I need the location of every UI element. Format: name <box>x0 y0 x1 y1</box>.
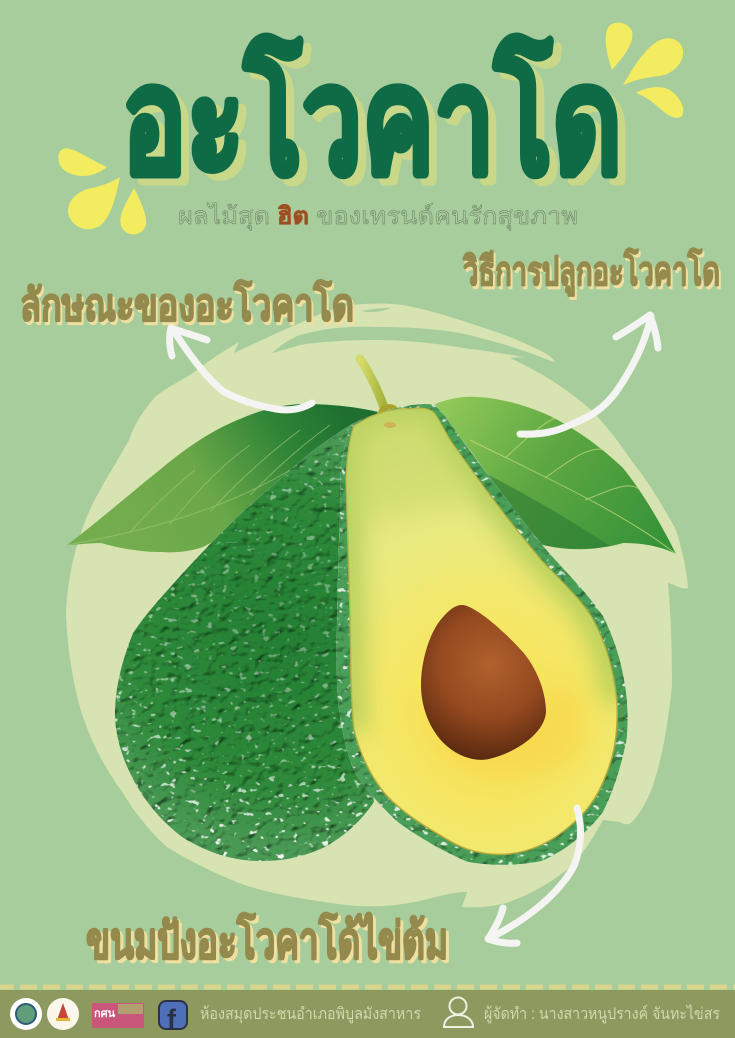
icon: facebook <box>159 1001 187 1034</box>
stem <box>360 359 400 424</box>
heading: ขนมปังอะโวคาโด้ไข่ต้ม: ขนมปังอะโวคาโด้ไข่ต้ม <box>89 916 451 972</box>
logo: round seal <box>10 998 42 1030</box>
flesh rim shading <box>346 408 617 778</box>
arrow: to recipe heading <box>488 808 580 943</box>
splash drops bottom left <box>58 148 146 234</box>
icon: facebook: f <box>167 1004 177 1034</box>
heading: ขนมปังอะโวคาโด้ไข่ต้ม <box>86 913 451 972</box>
subtitle: ผลไม้สุด ฮิต ของเทรนด์คนรักสุขภาพ <box>178 202 578 231</box>
outer skin of cut half <box>337 404 628 865</box>
cut half avocado <box>337 404 628 865</box>
heading: ลักษณะของอะโวคาโด: ลักษณะของอะโวคาโด <box>20 280 354 330</box>
neck dimple <box>384 422 396 428</box>
arrow: to planting heading <box>520 315 658 434</box>
library name: ห้องสมุดประชนอำเภอพิบูลมังสาหาร <box>200 1005 421 1024</box>
footer band <box>0 987 735 1038</box>
logo: crest <box>47 998 79 1030</box>
back avocado, textured skin <box>115 423 374 861</box>
pale brush blob behind avocado <box>66 304 688 907</box>
icon: person <box>444 998 473 1027</box>
right leaf <box>435 397 676 554</box>
arrow: to characteristics heading <box>170 328 312 410</box>
logo: pink card: กศน <box>94 1008 116 1020</box>
heading: ลักษณะของอะโวคาโด: ลักษณะของอะโวคาโด <box>22 283 356 333</box>
splash drops top right <box>606 23 683 118</box>
left leaf <box>67 404 378 552</box>
flesh <box>346 408 617 854</box>
logo: pink card <box>92 1003 144 1028</box>
heading: ขนมปังอะโวคาโด้ไข่ต้ม: ขนมปังอะโวคาโด้ไข่ต้ม <box>86 913 448 969</box>
avocado seed <box>421 605 546 760</box>
